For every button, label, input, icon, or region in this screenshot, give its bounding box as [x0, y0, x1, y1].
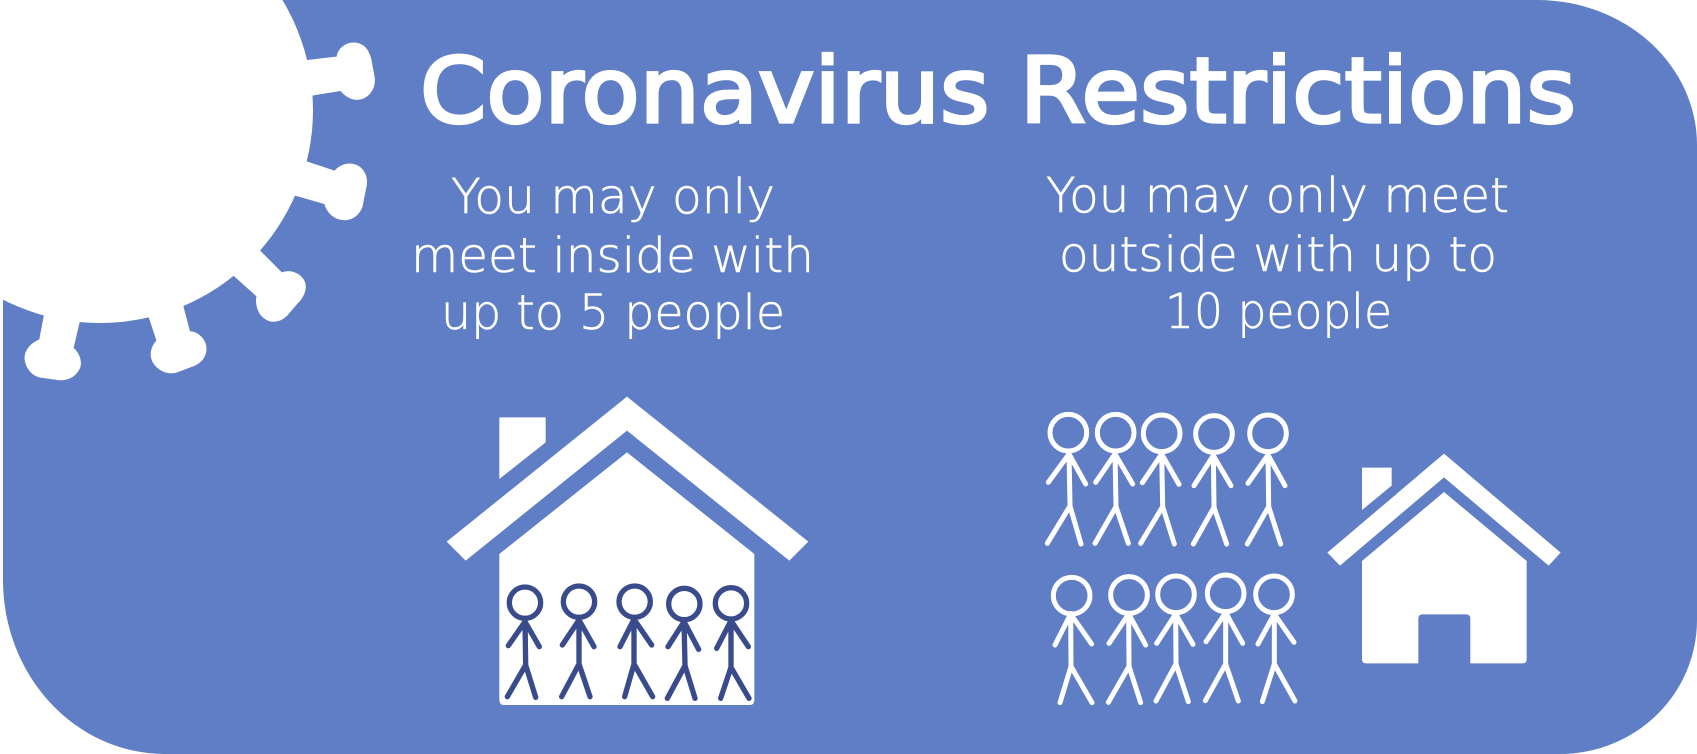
text block: indoor rule: You may only [451, 169, 775, 225]
icon: coronavirus [0, 0, 374, 379]
icon: house with five people inside [447, 397, 808, 705]
text block: outdoor rule: outside with up to [1059, 227, 1497, 283]
text block: indoor rule: up to 5 people [441, 285, 785, 341]
text block: indoor rule: meet inside with [411, 228, 814, 284]
text block: indoor rule [411, 169, 814, 341]
icon: empty house [1327, 454, 1561, 663]
title: Coronavirus Restrictions [420, 39, 1576, 144]
group: ten stick people outside [1047, 414, 1295, 703]
text block: outdoor rule: You may only meet [1046, 168, 1509, 224]
house chimney [499, 417, 546, 479]
house body [499, 452, 754, 705]
five stick people [507, 586, 749, 698]
text block: outdoor rule: 10 people [1165, 284, 1392, 340]
house roof [447, 397, 808, 561]
text block: outdoor rule [1046, 168, 1509, 340]
